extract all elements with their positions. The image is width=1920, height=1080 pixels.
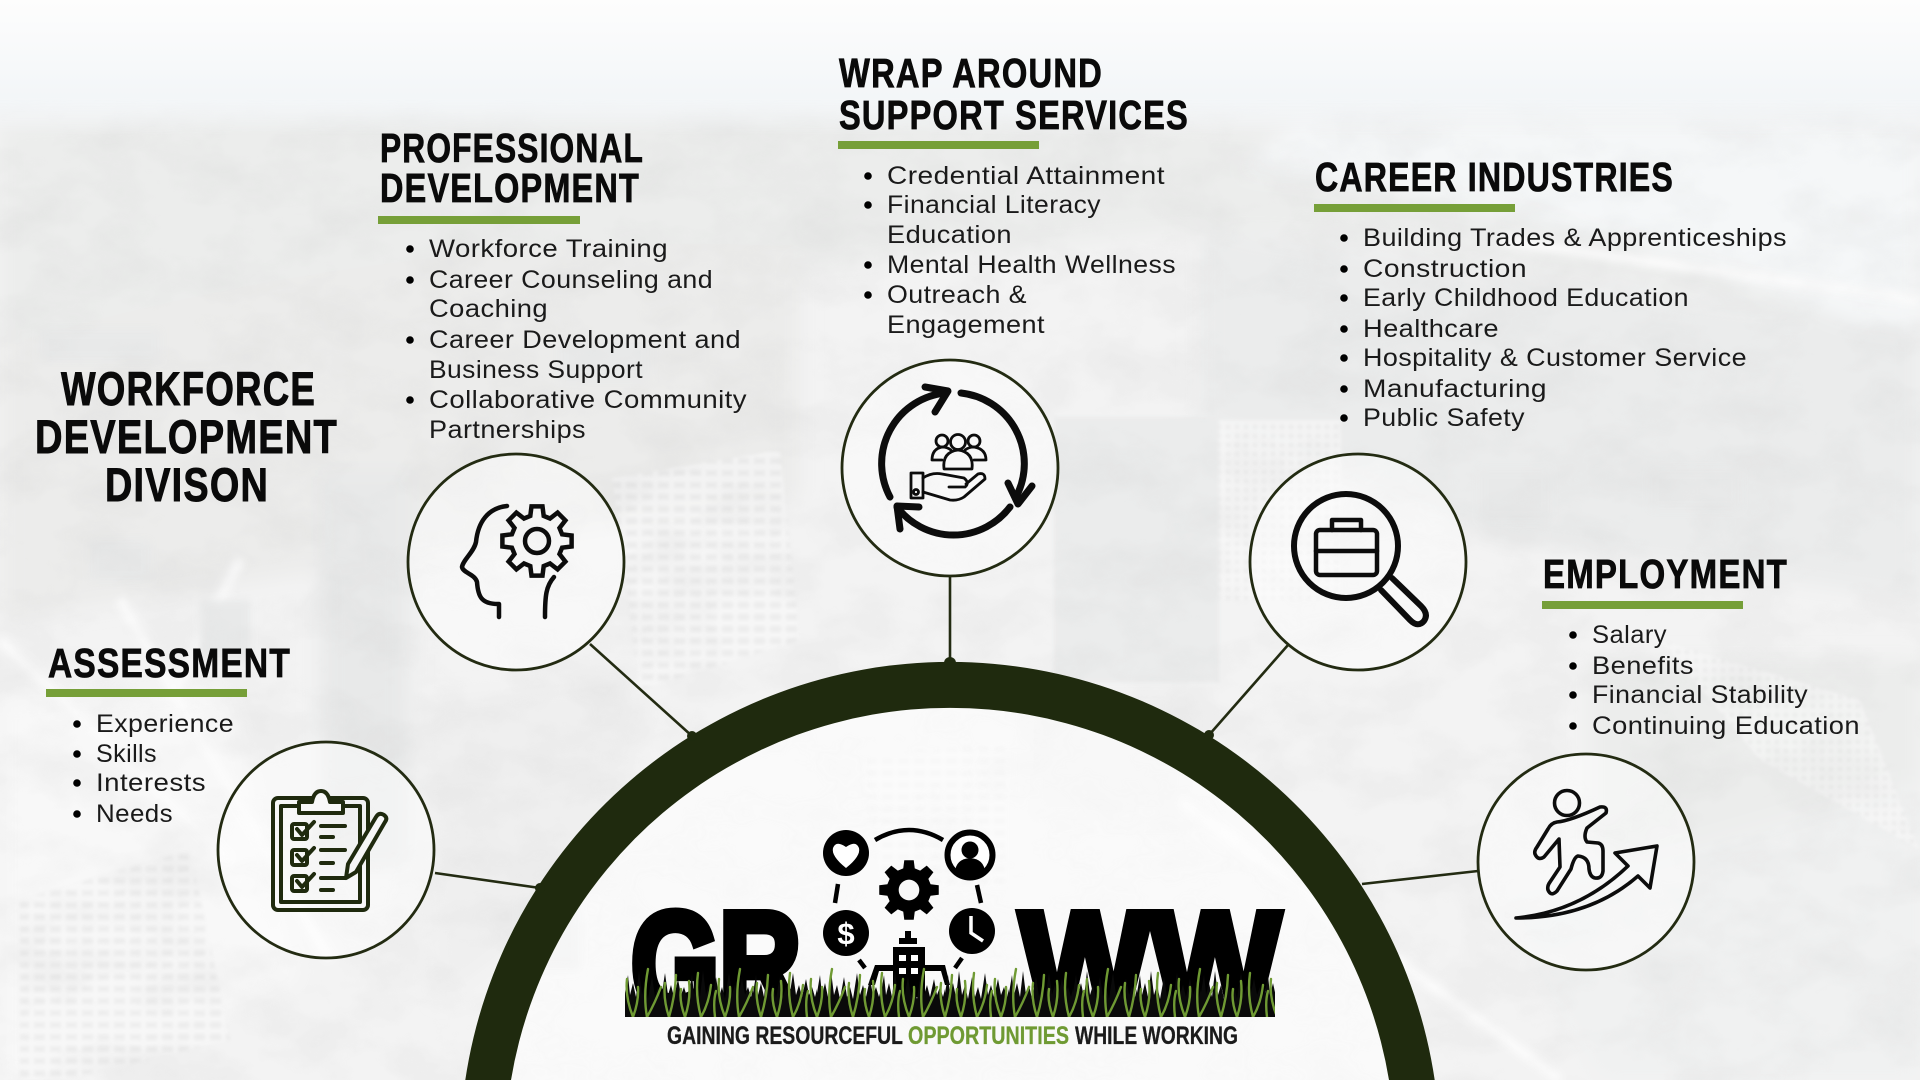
panel: employment [1478,551,1860,970]
heading: professional development: DEVELOPMENT [380,165,640,211]
list: wrap around support services: Mental Health Wellness [887,251,1176,279]
heading: wrap around support services [839,50,1189,138]
list: professional development: Career Development and [429,326,741,354]
logo tagline: WHILE WORKING [1075,1022,1238,1050]
logo tagline: OPPORTUNITIES [908,1022,1069,1050]
list: career industries: Public Safety [1363,404,1525,432]
icon: person climbing rising arrow [1478,754,1694,970]
list: assessment: Needs [96,800,173,828]
logo icon: building [868,931,950,997]
list: professional development: Business Support [429,356,643,384]
list: wrap around support services: Credential Attainment [887,162,1165,190]
logo arcs [835,830,981,968]
list: wrap around support services: Outreach & [887,281,1027,309]
icon: magnifier over briefcase [1250,454,1466,670]
panel: career industries [1250,154,1787,670]
list: career industries: Manufacturing [1363,375,1547,403]
list: professional development: Career Counseling and [429,266,713,294]
list: professional development: Collaborative Community [429,386,747,414]
heading: employment: EMPLOYMENT [1543,551,1788,597]
heading: professional development: PROFESSIONAL [380,125,644,171]
icon: cycle with people on hand [842,360,1058,576]
list: employment: Salary [1592,621,1667,649]
list: employment: Benefits [1592,652,1694,680]
logo wordmark letters [632,908,1286,999]
list: employment: Continuing Education [1592,712,1860,740]
list: career industries: Construction [1363,255,1527,283]
panel: assessment [46,640,434,958]
list: assessment [73,710,234,828]
heading: assessment: ASSESSMENT [48,640,291,686]
list: assessment: Skills [96,740,157,768]
connector lines [435,576,1478,888]
list: career industries: Hospitality & Customer Service [1363,344,1747,372]
panel: wrap around support services [838,50,1189,576]
logo: GROWW [625,830,1280,1050]
list: wrap around support services: Education [887,221,1012,249]
list: career industries: Early Childhood Education [1363,284,1689,312]
list: professional development: Partnerships [429,416,586,444]
title: workforce development division: WORKFORCE [61,362,316,415]
list: assessment: Interests [96,769,206,797]
logo grass [625,965,1275,1017]
list: professional development: Coaching [429,295,548,323]
logo wordmark letters: GR [631,882,801,1045]
heading: wrap around support services: SUPPORT SERVICES [839,92,1189,138]
title: workforce development division: DIVISON [105,458,269,511]
icon: head with gear [408,454,624,670]
logo icon: heart [823,830,869,876]
list: wrap around support services: Financial Literacy [887,191,1101,219]
list: career industries: Healthcare [1363,315,1499,343]
icon: clipboard checklist [218,742,434,958]
list: wrap around support services: Engagement [887,311,1045,339]
title: workforce development division: DEVELOPMENT [35,410,338,463]
logo tagline: GAINING RESOURCEFUL [667,1022,903,1050]
heading: career industries: CAREER INDUSTRIES [1315,154,1674,200]
logo icon: person [948,832,992,878]
logo icon: clock [949,908,995,954]
logo tagline [667,1022,1238,1050]
logo icon: dollar: $ [837,916,855,951]
list: professional development [406,235,747,444]
heading: professional development [380,125,644,211]
list: employment: Financial Stability [1592,681,1808,709]
logo icon: gear [879,860,939,920]
list: wrap around support services [864,162,1176,339]
title: workforce development division [35,362,338,511]
list: professional development: Workforce Training [429,235,668,263]
list: employment [1569,621,1860,740]
heading: wrap around support services: WRAP AROUND [839,50,1103,96]
arch ring [465,657,1435,1080]
list: career industries [1340,224,1787,432]
list: assessment: Experience [96,710,234,738]
list: career industries: Building Trades & Apprenticeships [1363,224,1787,252]
panel: professional development [378,125,747,670]
logo icon: dollar [823,910,869,956]
logo wordmark letters: WW [1020,882,1280,1045]
